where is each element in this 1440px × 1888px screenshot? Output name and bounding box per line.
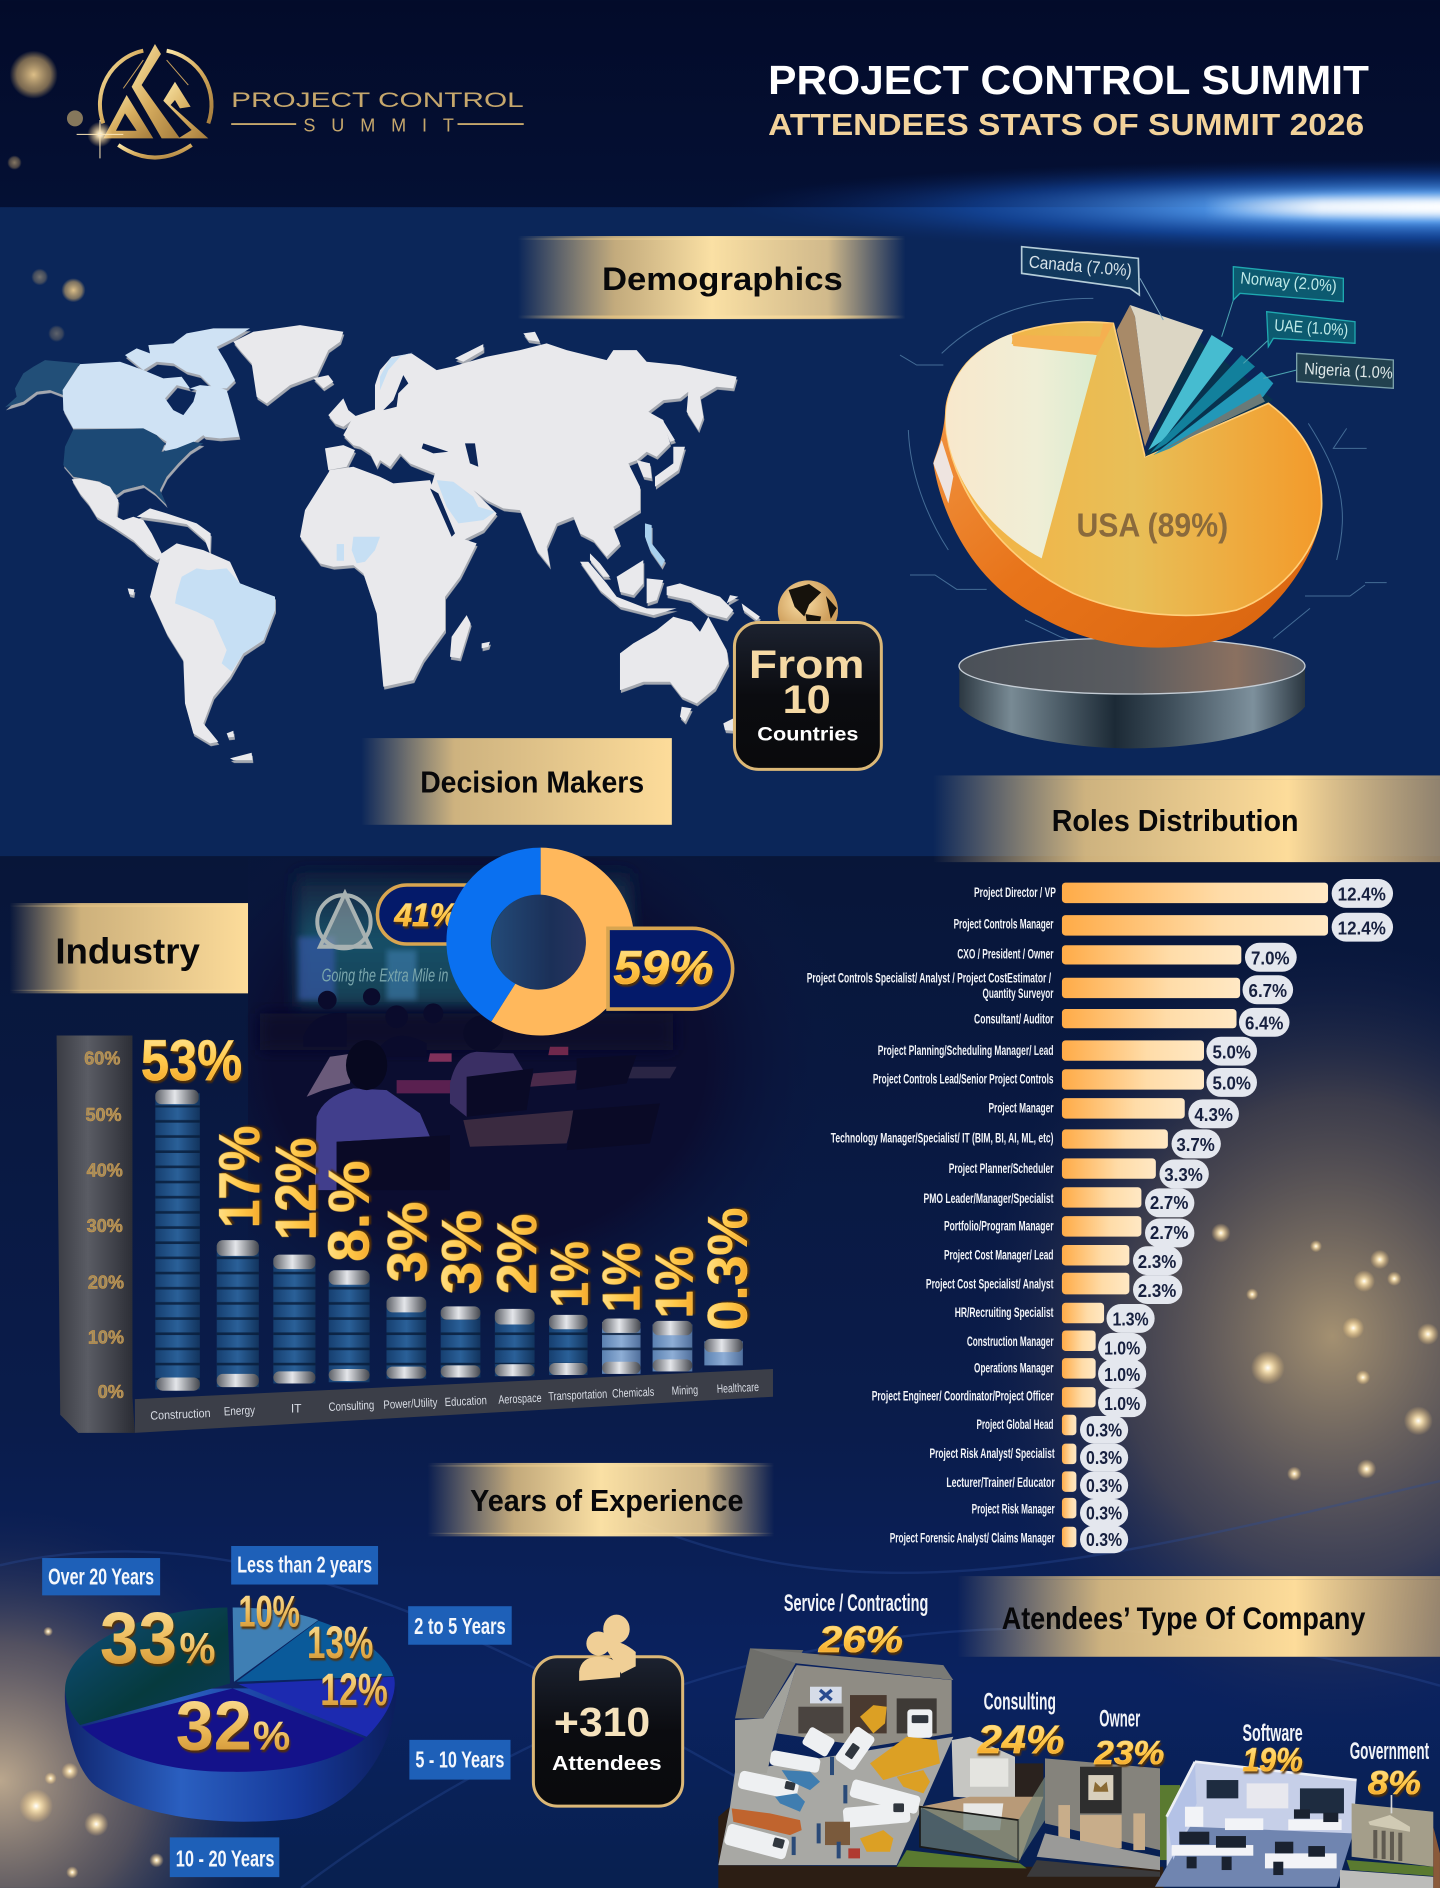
consulting office bbox=[897, 1737, 1045, 1868]
bar: Education bbox=[430, 1210, 492, 1409]
icon: people bbox=[579, 1615, 636, 1681]
role: Construction Manager bbox=[967, 1330, 1146, 1362]
label: 5 - 10 Years: 5 - 10 Years bbox=[415, 1747, 504, 1773]
slice: less than 2 years bbox=[233, 1607, 318, 1682]
badge 41% bbox=[377, 885, 467, 944]
logo bbox=[67, 44, 524, 158]
heading: Roles Distribution: Roles Distribution bbox=[1052, 805, 1299, 838]
heading: Decision Makers bbox=[361, 738, 672, 825]
New Guinea and Pacific islands bbox=[667, 583, 760, 620]
role: Project Controls Specialist bbox=[807, 970, 1293, 1004]
USA slice bbox=[933, 322, 1322, 648]
role: HR/Recruiting Specialist: HR/Recruiting Specialist bbox=[955, 1304, 1054, 1320]
Brazil bbox=[175, 568, 275, 672]
heading: Attendees' Type Of Company bbox=[957, 1576, 1440, 1657]
callout: Norway bbox=[1222, 267, 1343, 337]
role: Operations Manager: Operations Manager bbox=[974, 1360, 1054, 1376]
role: Planning/Scheduling Manager: 5.0% bbox=[1212, 1042, 1251, 1062]
role: Planning/Scheduling Manager: Project Planning/Scheduling Manager/ Lead bbox=[878, 1042, 1054, 1058]
role: Project Risk Manager: 0.3% bbox=[1086, 1504, 1122, 1524]
label: Service / Contracting 26%: Service / Contracting bbox=[784, 1590, 928, 1617]
crates and workers bbox=[792, 1757, 860, 1858]
label: Service / Contracting 26% bbox=[784, 1590, 928, 1660]
label: Software 19%: 19% bbox=[1243, 1741, 1303, 1779]
attendee in shirt bbox=[307, 1040, 430, 1190]
bar: Transportation: 1% bbox=[541, 1241, 600, 1308]
role: Project Risk Manager: Project Risk Manager bbox=[972, 1500, 1055, 1516]
bar: Mining: 1% bbox=[645, 1246, 704, 1318]
stat card: attendees: Attendees bbox=[552, 1752, 662, 1775]
label: Consulting 24% bbox=[977, 1689, 1064, 1762]
bar: Aerospace bbox=[486, 1214, 548, 1407]
South America bbox=[150, 543, 275, 743]
role: Project Controls Specialist: 6.7% bbox=[1249, 981, 1287, 1001]
role: Construction Manager: 1.0% bbox=[1104, 1339, 1140, 1359]
stat card: from 10 countries: 10 bbox=[783, 678, 831, 722]
role: Project Controls Manager: 12.4% bbox=[1338, 918, 1386, 938]
label: Less than 2 years bbox=[231, 1546, 378, 1585]
Africa bbox=[300, 467, 477, 687]
yellow trucks bbox=[860, 1705, 940, 1852]
Saudi Arabia bbox=[437, 480, 495, 523]
value 10%: 10% bbox=[238, 1588, 300, 1637]
role: Project Global Head: 0.3% bbox=[1086, 1420, 1122, 1440]
Scandinavia bbox=[380, 352, 413, 390]
logo wordmark: PROJECT CONTROL bbox=[231, 87, 524, 112]
owner building bbox=[1027, 1758, 1180, 1877]
value 33%: % bbox=[179, 1625, 216, 1673]
bar: Education: Education bbox=[444, 1393, 487, 1409]
small islands bbox=[128, 588, 252, 760]
pedestal bbox=[959, 638, 1305, 748]
ground base bbox=[718, 1807, 1163, 1888]
label: Owner 23%: 23% bbox=[1093, 1734, 1164, 1772]
role: Project Planner/Scheduler bbox=[949, 1158, 1209, 1188]
role: Project Planner/Scheduler: 3.3% bbox=[1164, 1165, 1203, 1185]
role: Project Risk Analyst bbox=[929, 1444, 1128, 1471]
Philippines bbox=[645, 523, 665, 567]
bar: Healthcare: 0.3% bbox=[696, 1208, 758, 1330]
role: Operations Manager bbox=[974, 1358, 1146, 1388]
label: 2 to 5 Years: 2 to 5 Years bbox=[414, 1613, 506, 1639]
role: Project Manager bbox=[988, 1098, 1239, 1128]
callout: UAE bbox=[1243, 312, 1355, 363]
role: Technology Manager: Technology Manager/Specialist/ IT (BIM, BI, AI, ML, etc) bbox=[831, 1130, 1054, 1146]
donut chart: decision makers bbox=[377, 848, 733, 1036]
role: Controls Lead: Project Controls Lead/Senior Project Controls bbox=[873, 1071, 1054, 1087]
conference photo backdrop bbox=[248, 857, 850, 1363]
bar: Power/Utility: 3% bbox=[376, 1202, 438, 1282]
role: Project Forensic Analyst bbox=[890, 1526, 1128, 1553]
USA value: USA (89%) bbox=[1076, 508, 1228, 545]
role: Project Director / VP bbox=[974, 879, 1393, 908]
screen tagline: Going the Extra Mile in bbox=[322, 965, 448, 986]
role: Project Cost Specialist: 2.3% bbox=[1138, 1281, 1176, 1301]
Canada bbox=[63, 362, 239, 452]
orange truck bbox=[732, 1808, 802, 1835]
bar: Consulting: 8.% bbox=[317, 1161, 381, 1262]
value 12%: 12% bbox=[320, 1664, 388, 1715]
stat card: from 10 countries: Countries bbox=[757, 725, 858, 746]
label: Less than 2 years: Less than 2 years bbox=[237, 1551, 372, 1577]
Japan and Korea bbox=[637, 418, 685, 487]
bar: Chemicals: Chemicals bbox=[612, 1385, 654, 1401]
role: Project Controls Specialist: Project Controls Specialist/ Analyst / Project CostEstimator / bbox=[807, 970, 1051, 986]
slice shadow bbox=[1145, 337, 1273, 457]
stage screen bbox=[297, 873, 630, 1007]
role: PMO Leader bbox=[923, 1187, 1194, 1217]
slice: 2 to 5 years bbox=[237, 1621, 393, 1682]
donut hole photo bbox=[492, 893, 591, 992]
chart axis column: 10% bbox=[88, 1328, 124, 1348]
world map bbox=[5, 325, 760, 760]
value 13%: 13% bbox=[307, 1617, 373, 1668]
bar: Energy bbox=[208, 1126, 272, 1419]
Baltic, Black and Caspian seas bbox=[383, 375, 478, 537]
role: Project Director / VP: Project Director / VP bbox=[974, 884, 1056, 900]
label: Over 20 Years bbox=[42, 1558, 160, 1595]
Caribbean arc bbox=[137, 508, 211, 553]
bar: Consulting bbox=[317, 1161, 381, 1414]
heading: Industry: Industry bbox=[55, 930, 200, 971]
pie side wall bbox=[65, 1687, 397, 1822]
heading: Years of Experience bbox=[427, 1463, 774, 1536]
bar chart: industry bbox=[57, 1029, 773, 1433]
badge 59%: 59% bbox=[613, 941, 713, 994]
bar chart: roles distribution bbox=[807, 879, 1393, 1553]
role: Project Risk Analyst: Project Risk Analyst/ Specialist bbox=[929, 1445, 1055, 1461]
label: 10 - 20 Years bbox=[170, 1837, 279, 1877]
title bbox=[768, 57, 1369, 142]
bar: IT bbox=[264, 1138, 328, 1415]
role: Project Manager: 4.3% bbox=[1194, 1105, 1233, 1125]
bar: Construction: 53% bbox=[141, 1029, 242, 1093]
role: Project Engineer: 1.0% bbox=[1104, 1394, 1140, 1414]
role: CXO: 7.0% bbox=[1251, 948, 1289, 968]
role: Project Controls Manager: Project Controls Manager bbox=[954, 915, 1054, 931]
bar: Construction: Construction bbox=[150, 1406, 211, 1423]
role: Portfolio/Program Manager: Portfolio/Program Manager bbox=[944, 1218, 1054, 1234]
bar: Power/Utility bbox=[376, 1202, 438, 1412]
Greenland bbox=[233, 325, 343, 403]
garage building bbox=[735, 1648, 953, 1773]
role: Portfolio/Program Manager bbox=[944, 1216, 1194, 1247]
attendee right bbox=[450, 1015, 523, 1117]
callout: Nigeria: Nigeria (1.0% bbox=[1304, 359, 1393, 383]
subtitle: ATTENDEES STATS OF SUMMIT 2026 bbox=[768, 109, 1364, 142]
government building bbox=[1340, 1795, 1440, 1888]
heading: Demographics: Demographics bbox=[602, 261, 843, 297]
label: 5 - 10 Years bbox=[409, 1740, 511, 1780]
role: HR/Recruiting Specialist bbox=[955, 1303, 1155, 1333]
UK bbox=[328, 398, 357, 427]
label: Service / Contracting 26%: 26% bbox=[818, 1618, 903, 1660]
role: Project Manager: Project Manager bbox=[988, 1100, 1054, 1116]
label: Software 19% bbox=[1243, 1720, 1303, 1779]
label: Government 8%: 8% bbox=[1368, 1764, 1421, 1802]
bar: Consulting: Consulting bbox=[328, 1398, 375, 1414]
slice 41% bbox=[446, 848, 541, 1022]
bar: Power/Utility: Power/Utility bbox=[383, 1395, 438, 1412]
blue cars bbox=[775, 1770, 820, 1812]
UAE slice bbox=[1150, 355, 1255, 453]
chart axis column: 50% bbox=[85, 1105, 122, 1125]
role: Project Global Head: Project Global Head bbox=[976, 1416, 1054, 1432]
Canada slice bbox=[1117, 305, 1203, 447]
Alaska bbox=[5, 360, 80, 407]
label: Owner 23%: Owner bbox=[1099, 1706, 1140, 1733]
USA bbox=[63, 428, 203, 505]
value 32%: % bbox=[253, 1712, 290, 1758]
label: Consulting 24%: Consulting bbox=[984, 1689, 1056, 1716]
heading: Decision Makers: Decision Makers bbox=[420, 766, 644, 799]
role: Consultant/ Auditor: Consultant/ Auditor bbox=[974, 1010, 1054, 1026]
label: Consulting 24%: 24% bbox=[977, 1718, 1064, 1762]
role: Portfolio/Program Manager: 2.7% bbox=[1150, 1223, 1188, 1243]
pie chart: years of experience bbox=[65, 1588, 397, 1822]
label: Software 19%: Software bbox=[1243, 1720, 1303, 1747]
label: Government 8% bbox=[1350, 1738, 1429, 1802]
eastern hemisphere bbox=[343, 332, 760, 731]
role: HR/Recruiting Specialist: 1.3% bbox=[1113, 1310, 1149, 1330]
stat card: attendees: +310 bbox=[554, 1699, 650, 1745]
chart platform bbox=[135, 1369, 773, 1433]
chairs bbox=[337, 1055, 660, 1190]
bar: Healthcare bbox=[696, 1208, 759, 1396]
role: Project Engineer: Project Engineer/ Coordinator/Project Officer bbox=[872, 1387, 1054, 1403]
white vans bbox=[723, 1709, 932, 1860]
title: PROJECT CONTROL SUMMIT bbox=[768, 57, 1369, 103]
northern islands bbox=[455, 332, 540, 362]
windshields bbox=[772, 1715, 928, 1849]
badge 41%: 41% bbox=[393, 897, 458, 933]
logo emblem bbox=[67, 44, 212, 158]
Norway slice bbox=[1148, 335, 1233, 450]
bar: Energy: 17% bbox=[208, 1126, 272, 1228]
callout: Nigeria bbox=[1263, 353, 1393, 388]
Iceland bbox=[313, 375, 333, 388]
label: Owner 23% bbox=[1093, 1706, 1164, 1772]
bar: Transportation bbox=[541, 1241, 608, 1404]
stat card: attendees bbox=[533, 1657, 683, 1806]
role: Project Engineer bbox=[872, 1387, 1146, 1417]
role: Project Global Head bbox=[976, 1415, 1128, 1444]
role: Lecturer/Trainer: Lecturer/Trainer/ Educator bbox=[946, 1474, 1055, 1490]
Indonesia and Malaysia bbox=[580, 553, 677, 615]
bar: Chemicals: 1% bbox=[592, 1243, 651, 1312]
role: Consultant/ Auditor: 6.4% bbox=[1245, 1013, 1283, 1033]
decorative arcs bbox=[900, 298, 1387, 661]
bar: Healthcare: Healthcare bbox=[716, 1380, 759, 1396]
heading: Years of Experience: Years of Experience bbox=[470, 1485, 743, 1518]
role: Project Forensic Analyst: 0.3% bbox=[1086, 1530, 1122, 1550]
slice: over 20 years bbox=[65, 1607, 230, 1725]
slice: 10 to 20 years bbox=[82, 1688, 365, 1772]
role: Technology Manager: 3.7% bbox=[1176, 1135, 1215, 1155]
Ghana bbox=[337, 544, 344, 561]
role: Controls Lead: 5.0% bbox=[1212, 1074, 1251, 1094]
Eurasia bbox=[343, 343, 737, 567]
globe icon bbox=[778, 580, 838, 641]
bar: Aerospace: 2% bbox=[486, 1214, 548, 1294]
role: Project Controls Manager bbox=[954, 913, 1393, 942]
callout: UAE: UAE (1.0%) bbox=[1274, 316, 1349, 340]
badge 59% bbox=[608, 928, 733, 1009]
role: Project Director / VP: 12.4% bbox=[1338, 885, 1386, 905]
chart axis column bbox=[57, 1036, 135, 1433]
chart axis column: 30% bbox=[87, 1216, 123, 1236]
Nigeria bbox=[352, 537, 380, 563]
label: Over 20 Years: Over 20 Years bbox=[48, 1564, 154, 1590]
stat card: from 10 countries: From bbox=[749, 643, 864, 687]
bar: Education: 3% bbox=[430, 1210, 492, 1294]
western hemisphere bbox=[5, 325, 477, 760]
role: Project Cost Specialist: Project Cost Specialist/ Analyst bbox=[926, 1275, 1054, 1291]
chart axis column: 0% bbox=[98, 1382, 124, 1402]
label: 10 - 20 Years: 10 - 20 Years bbox=[176, 1845, 275, 1871]
Madagascar bbox=[450, 615, 490, 658]
role: Project Cost Manager: 2.3% bbox=[1138, 1252, 1176, 1272]
role: Construction Manager: Construction Manager bbox=[967, 1333, 1054, 1349]
bar: Aerospace: Aerospace bbox=[498, 1391, 542, 1407]
callout: Canada: Canada (7.0%) bbox=[1028, 251, 1133, 280]
screen logo bbox=[317, 893, 371, 948]
Tasmania and New Zealand bbox=[680, 707, 733, 731]
role: Project Risk Manager bbox=[972, 1498, 1128, 1527]
Australia bbox=[620, 617, 728, 703]
Iberia bbox=[325, 445, 355, 470]
heading: Industry bbox=[10, 903, 248, 993]
role: Project Cost Manager bbox=[944, 1245, 1182, 1275]
role: PMO Leader: 2.7% bbox=[1150, 1193, 1188, 1213]
logo sub-wordmark: SUMMIT bbox=[303, 115, 454, 135]
role: Lecturer/Trainer bbox=[946, 1471, 1128, 1499]
bar: Chemicals bbox=[592, 1243, 654, 1401]
bar: IT: 12% bbox=[264, 1138, 328, 1240]
pie chart: countries bbox=[900, 247, 1393, 748]
bar: Mining: Mining bbox=[671, 1383, 698, 1398]
slice 59% bbox=[491, 848, 634, 1036]
audience back row bbox=[260, 988, 673, 1057]
role: Operations Manager: 1.0% bbox=[1104, 1365, 1140, 1385]
role: Project Cost Manager: Project Cost Manager/ Lead bbox=[944, 1246, 1054, 1262]
slice: 5 to 10 years bbox=[238, 1677, 395, 1737]
illustration: service garage, consulting office and owner building bbox=[718, 1648, 1180, 1888]
role: Controls Lead bbox=[873, 1068, 1257, 1097]
bar: Transportation: Transportation bbox=[548, 1387, 608, 1404]
role: Project Planner/Scheduler: Project Planner/Scheduler bbox=[949, 1160, 1054, 1176]
role: Technology Manager bbox=[831, 1129, 1221, 1158]
callout: Canada bbox=[1022, 247, 1163, 320]
role: Project Risk Analyst: 0.3% bbox=[1086, 1448, 1122, 1468]
callout: Norway: Norway (2.0%) bbox=[1240, 268, 1338, 296]
bar: Mining bbox=[645, 1246, 704, 1398]
role: Consultant/ Auditor bbox=[974, 1008, 1289, 1037]
heading: Attendees' Type Of Company: Atendees’ Type Of Company bbox=[1002, 1601, 1366, 1636]
role: CXO bbox=[957, 943, 1297, 972]
illustration: software office and government building bbox=[1155, 1762, 1440, 1888]
Nigeria slice bbox=[1153, 372, 1273, 455]
bar: Construction bbox=[141, 1029, 242, 1423]
bar: Energy: Energy bbox=[223, 1403, 255, 1419]
tables bbox=[397, 1047, 677, 1147]
role: Lecturer/Trainer: 0.3% bbox=[1086, 1476, 1122, 1496]
heading: Roles Distribution bbox=[933, 775, 1440, 862]
value 32%: 32 bbox=[176, 1686, 252, 1764]
stat card: from 10 countries bbox=[734, 623, 881, 769]
bar: IT: IT bbox=[291, 1401, 302, 1415]
software office bbox=[1155, 1762, 1357, 1887]
role: Project Forensic Analyst: Project Forensic Analyst/ Claims Manager bbox=[890, 1529, 1055, 1545]
value 33%: 33 bbox=[100, 1597, 177, 1679]
role: Project Controls Specialist: Quantity Surveyor bbox=[982, 985, 1054, 1001]
Canadian arctic islands bbox=[125, 328, 250, 388]
role: CXO: CXO / President / Owner bbox=[957, 945, 1054, 961]
Mexico and Central America bbox=[72, 478, 163, 560]
garage yard bbox=[718, 1737, 953, 1865]
chart axis column: 20% bbox=[88, 1272, 124, 1292]
role: Project Cost Specialist bbox=[926, 1273, 1182, 1304]
label: 2 to 5 Years bbox=[408, 1606, 512, 1645]
value 32% bbox=[176, 1686, 290, 1764]
chart axis column: 40% bbox=[87, 1160, 123, 1180]
chart axis column: 60% bbox=[84, 1048, 120, 1068]
role: PMO Leader: PMO Leader/Manager/Specialist bbox=[923, 1190, 1054, 1206]
heading: Demographics bbox=[518, 236, 905, 319]
role: Planning/Scheduling Manager bbox=[878, 1037, 1257, 1066]
